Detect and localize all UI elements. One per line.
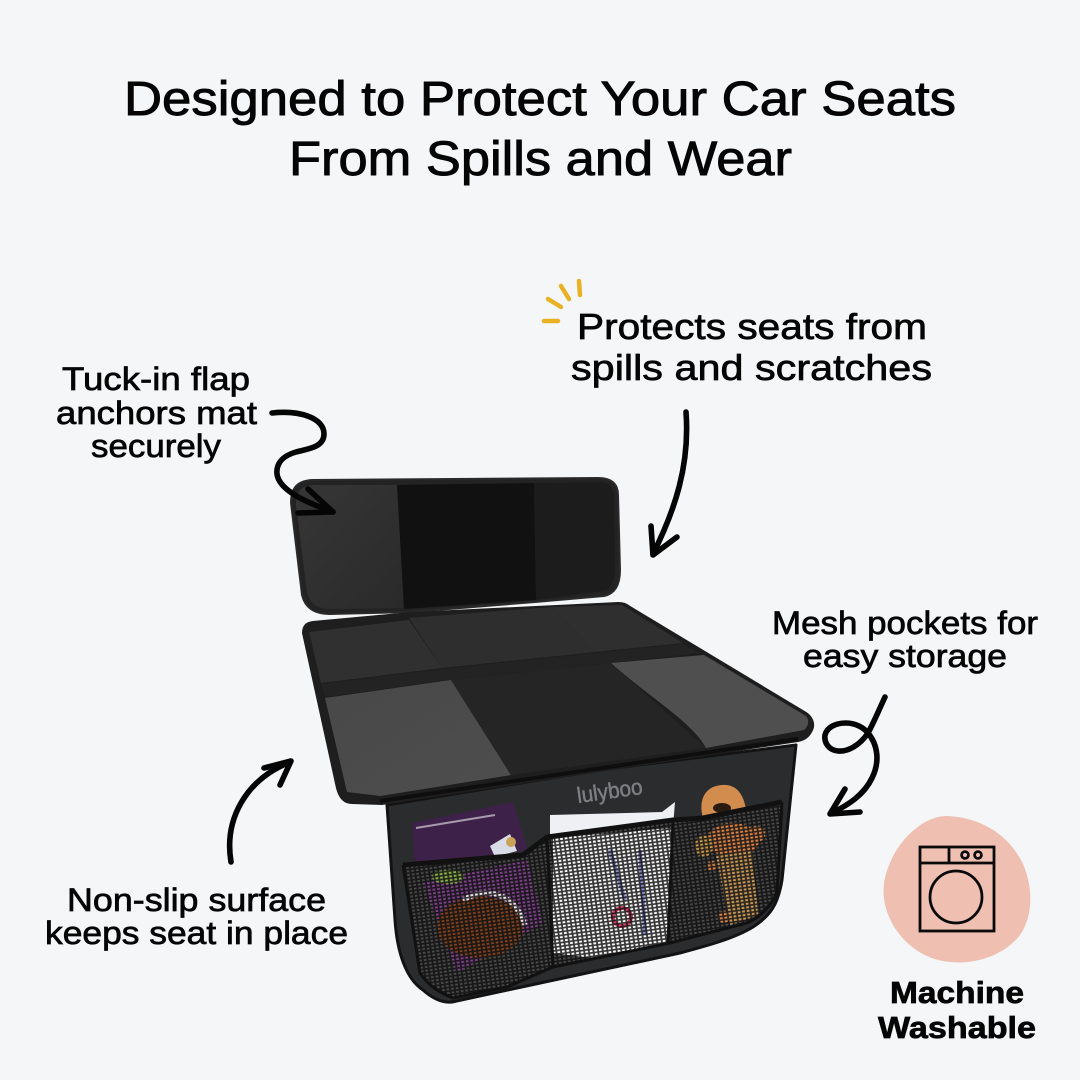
pocket contents above the mesh: white pack [550,802,675,837]
callout: tuck-in flap: securely [91,428,221,464]
brand logo: lulyboo [575,774,644,808]
callout: mesh pockets: easy storage [803,638,1007,674]
mesh pockets [403,785,782,998]
pocket contents above the mesh: snack pack [412,802,528,865]
callout: protects seats [571,306,932,388]
rear centre panel [409,607,595,668]
label [878,975,1036,1045]
rear right panel [552,605,683,652]
callout: non-slip surface: Non-slip surface [67,882,326,918]
snack behind mesh [423,860,543,973]
label: Washable [878,1010,1036,1045]
pocket dividers and binding [403,802,782,865]
label: Machine [890,975,1024,1010]
icon: washing machine [920,847,994,931]
arrow: non-slip surface [230,761,291,862]
callout: tuck-in flap: Tuck-in flap [62,361,250,397]
rear left panel [309,620,442,683]
arrow: tuck-in flap [272,412,333,513]
callout: non-slip surface: keeps seat in place [45,915,348,951]
title: From Spills and Wear [289,133,792,186]
callout: protects seats: spills and scratches [571,347,932,388]
callout: mesh pockets: Mesh pockets for [772,605,1038,641]
peach blob [884,816,1030,963]
callout: protects seats: Protects seats from [577,306,927,347]
callout: non-slip surface [45,882,348,951]
front right panel [611,655,808,748]
product: seat protector mat [291,478,813,1002]
icon: yellow sparkle [544,281,580,321]
title [124,73,956,186]
pocket contents above the mesh: toy head [701,785,747,818]
arrow: protects seats [651,412,687,555]
callout: mesh pockets [772,605,1038,674]
callout: tuck-in flap [56,361,257,464]
title: Designed to Protect Your Car Seats [124,73,956,126]
centre strip [321,644,700,697]
toy behind mesh [695,823,765,925]
callout: tuck-in flap: anchors mat [56,395,257,431]
mesh backing [403,802,782,998]
lower storage panel [387,745,796,1002]
seat cushion [303,603,813,804]
front centre panel [451,663,706,775]
arrow: mesh pockets [825,697,885,814]
front left panel [325,680,511,796]
back rest flap [291,478,620,614]
badge: machine washable [878,816,1036,1045]
white pack behind mesh [553,828,673,958]
mesh overlay [403,802,782,998]
